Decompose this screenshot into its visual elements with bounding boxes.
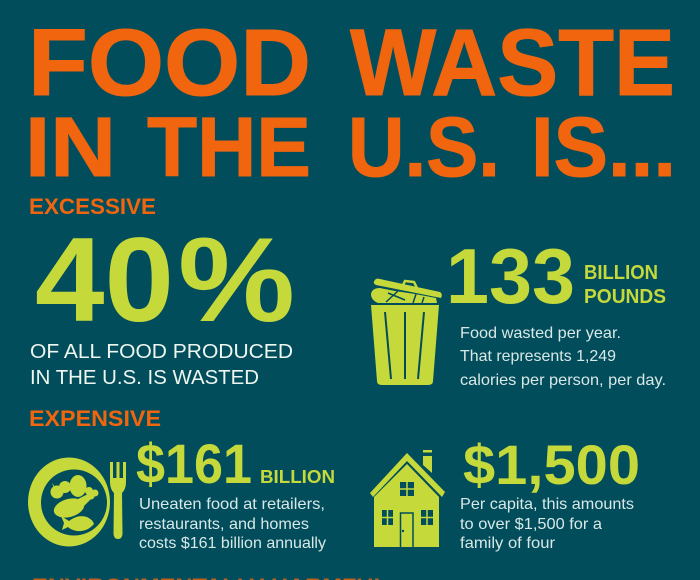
text: 133 description: That represents 1,249	[460, 348, 616, 365]
text: 40% description: OF ALL FOOD PRODUCED	[30, 341, 293, 363]
stat: $161 billion: BILLION	[260, 466, 335, 487]
stat: 40%: %	[178, 213, 295, 347]
icon: plate	[28, 458, 110, 546]
icon: plate of food and fork	[28, 458, 126, 546]
stat: 133 billion pounds	[446, 232, 666, 320]
heading: expensive: EXPENSIVE	[29, 406, 161, 431]
text: $161 description: costs $161 billion annually	[139, 535, 326, 552]
title	[25, 10, 676, 194]
text: 133 description: Food wasted per year.	[460, 325, 621, 342]
icon: house	[370, 450, 445, 547]
title: FOOD	[28, 10, 311, 116]
text: 40% description: IN THE U.S. IS WASTED	[30, 367, 259, 389]
stat: 40%	[35, 213, 295, 347]
icon: windows	[382, 482, 433, 525]
text: 133 description	[460, 325, 666, 389]
icon: fork	[110, 462, 126, 539]
text: $1,500 description	[460, 496, 634, 552]
title: IS...	[531, 100, 676, 194]
title: WASTE	[350, 10, 675, 116]
text: $1,500 description: to over $1,500 for a	[460, 516, 602, 533]
text: 133 description: calories per person, per day.	[460, 372, 666, 389]
stat: $161 billion: $161	[136, 432, 252, 495]
stat: 40%: 40	[35, 213, 174, 347]
stat: $1,500: $1,500	[463, 433, 640, 496]
text: $161 description: restaurants, and homes	[139, 516, 309, 533]
text: $161 description	[139, 496, 326, 552]
title: IN	[25, 100, 116, 194]
icon: produce	[50, 475, 98, 500]
icon: chicken leg	[52, 493, 93, 521]
text: $1,500 description: Per capita, this amounts	[460, 496, 634, 513]
stat: $161 billion	[136, 432, 335, 495]
stat: 133 billion pounds: 133	[446, 232, 575, 320]
title: U.S.	[348, 100, 500, 194]
stat: 133 billion pounds: POUNDS	[584, 286, 666, 308]
stat: 133 billion pounds: BILLION	[584, 262, 658, 284]
heading: excessive: EXCESSIVE	[29, 194, 156, 219]
text: $1,500 description: family of four	[460, 535, 556, 552]
icon: fish	[61, 516, 94, 531]
title: THE	[147, 100, 311, 194]
icon: door	[400, 513, 413, 547]
text: 40% description	[30, 341, 293, 389]
icon: trash can	[371, 279, 442, 385]
text: $161 description: Uneaten food at retailers,	[139, 496, 325, 513]
